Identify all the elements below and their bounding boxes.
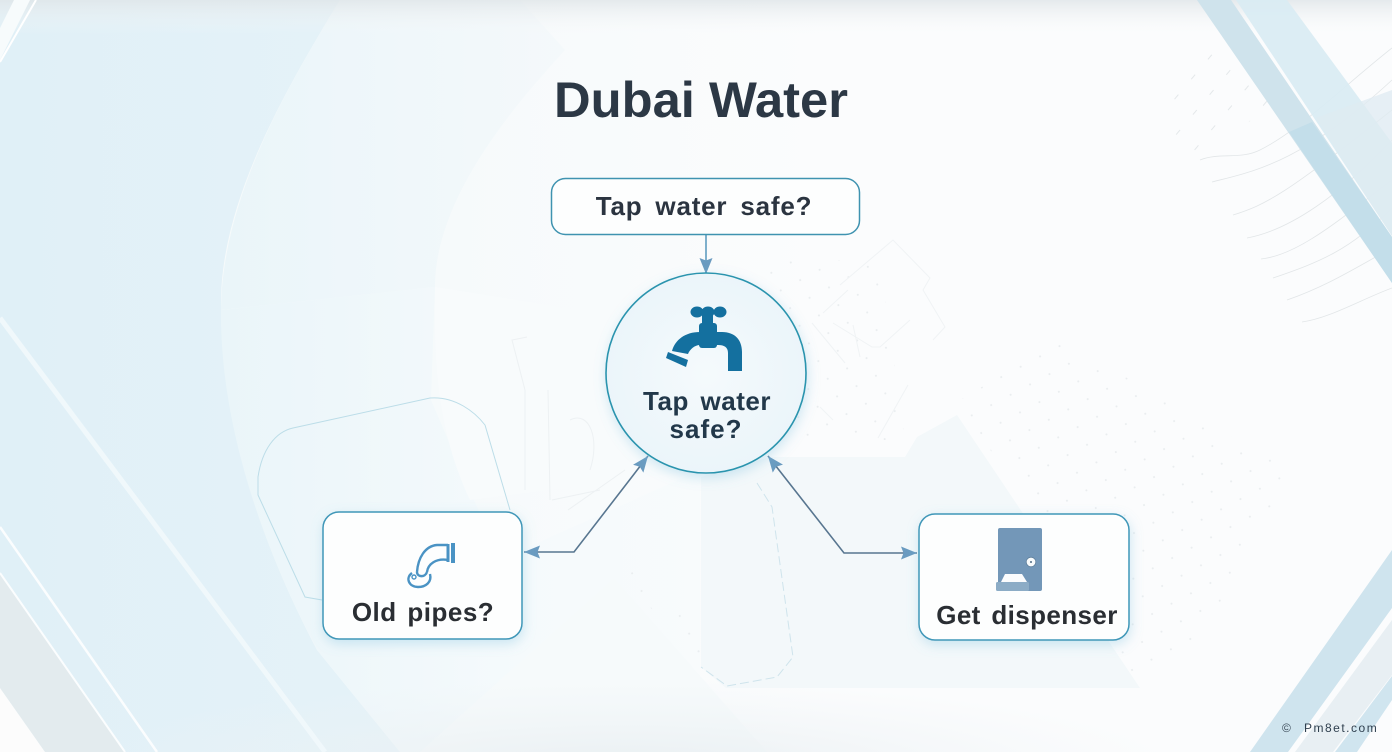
- diagonal bands: bottom right: [1250, 550, 1392, 752]
- pale geometric panels: [701, 415, 1140, 688]
- connector: circle to old pipes box: [524, 456, 648, 552]
- dashed outline bottom centre: [701, 483, 793, 686]
- flow lines upper right: [1200, 48, 1392, 322]
- icon: water tap: [666, 306, 742, 371]
- footer credit: ©: [1282, 721, 1291, 735]
- icon: dispenser: [996, 528, 1042, 591]
- left diagonal light streaks: [0, 318, 325, 752]
- icon: pipe: [408, 543, 453, 587]
- central circle node: safe?: [670, 414, 742, 444]
- dot fields: [960, 340, 1290, 680]
- left blue region: [0, 0, 400, 752]
- lower centre tint: [221, 287, 767, 752]
- title: Dubai Water: [554, 72, 848, 128]
- panel: get dispenser: [919, 514, 1129, 640]
- central circle node: [606, 273, 806, 473]
- footer credit: Pm8et.com: [1304, 721, 1378, 735]
- faint map and line decorations: [258, 35, 1392, 686]
- panel label: Get dispenser: [936, 600, 1118, 630]
- pale outline left: [258, 398, 510, 600]
- middle arc band: [221, 0, 565, 310]
- panel label: Old pipes?: [352, 597, 494, 627]
- question box: tap water safe: Tap water safe?: [596, 191, 812, 221]
- node label: Tap water: [643, 386, 771, 416]
- question box: tap water safe: [552, 178, 860, 234]
- diagonal bands: top right: [1197, 0, 1392, 283]
- connector: circle to get dispenser box: [768, 456, 917, 553]
- faint street lines: [512, 337, 625, 510]
- panel: old pipes: [323, 512, 522, 639]
- connector: top box to circle: [705, 235, 707, 274]
